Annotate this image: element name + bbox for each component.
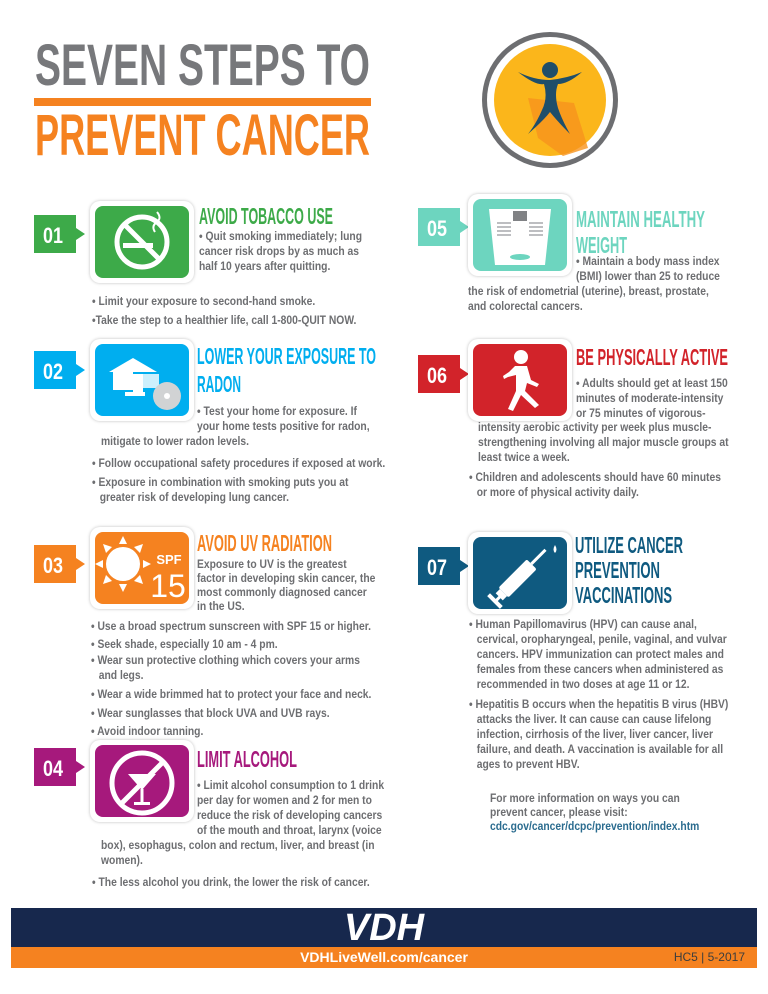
panel: 07 vaccinations: failure, and death. A vaccination is available for all — [477, 742, 723, 756]
text: minutes of moderate-intensity — [576, 391, 723, 405]
icon: house radon — [90, 339, 194, 421]
text: (BMI) lower than 25 to reduce — [576, 269, 720, 283]
text: in the US. — [197, 599, 245, 613]
text — [197, 778, 384, 837]
text: more information: For more information on ways you can — [490, 791, 680, 805]
text — [576, 254, 720, 283]
text: more information: prevent cancer, please visit: — [490, 805, 628, 819]
panel: 05 weight: and colorectal cancers. — [468, 299, 583, 313]
heading — [197, 343, 376, 397]
text bullets: • Seek shade, especially 10 am - 4 pm. — [91, 637, 278, 651]
heading: RADON — [197, 371, 241, 397]
text: cancer risk drops by as much as — [199, 244, 359, 258]
text: • Maintain a body mass index — [576, 254, 720, 268]
panel: 02 radon: greater risk of developing lung cancer. — [100, 490, 289, 504]
text: Exposure to UV is the greatest — [197, 557, 347, 571]
text: half 10 years after quitting. — [199, 259, 330, 273]
number 01: 01 — [43, 223, 63, 248]
footer code: HC5 | 5-2017 — [674, 950, 745, 964]
panel: 06 active — [418, 337, 729, 499]
text bullet: • Children and adolescents should have 60 minutes — [469, 470, 721, 484]
panel: 03 uv: • Avoid indoor tanning. — [91, 724, 203, 738]
number 03 — [34, 545, 85, 583]
panel: 03 uv — [34, 525, 375, 738]
footer logo VDH: VDH — [344, 907, 424, 949]
icon: sun spf — [90, 527, 194, 609]
icon: runner — [468, 339, 572, 421]
text — [197, 404, 370, 433]
number 04: 04 — [43, 756, 64, 781]
panel: 07 vaccinations: infection, cirrhosis of the liver, liver cancer, liver — [477, 727, 713, 741]
text bullets: • Follow occupational safety procedures if exposed at work. — [92, 456, 385, 470]
heading — [575, 532, 683, 608]
text: most commonly diagnosed cancer — [197, 585, 367, 599]
number 07 — [418, 547, 468, 585]
number 06 — [418, 355, 468, 393]
text bullets — [92, 294, 356, 327]
title — [34, 33, 371, 168]
panel: 04 alcohol: box), esophagus, colon and rectum, liver, and breast (in — [101, 838, 375, 852]
text bullets: • Limit your exposure to second-hand smoke. — [92, 294, 315, 308]
panel: 04 alcohol — [34, 738, 384, 889]
icon: sun spf: SPF — [156, 552, 182, 567]
footer url — [11, 947, 757, 968]
heading — [576, 206, 705, 256]
text: • Test your home for exposure. If — [197, 404, 357, 418]
panel: 03 uv: • Wear a wide brimmed hat to protect your face and neck. — [91, 687, 371, 701]
text: factor in developing skin cancer, the — [197, 571, 375, 585]
text bullet: • The less alcohol you drink, the lower the risk of cancer. — [92, 875, 370, 889]
panel: 01 avoid tobacco — [34, 199, 362, 327]
panel: 03 uv: • Wear sunglasses that block UVA and UVB rays. — [91, 706, 330, 720]
text bullets: • Human Papillomavirus (HPV) can cause anal, — [469, 617, 697, 631]
number 02 — [34, 351, 85, 389]
panel: 02 radon: • Exposure in combination with smoking puts you at — [92, 475, 348, 489]
panel: 06 active: intensity aerobic activity per week plus muscle- — [478, 420, 711, 434]
icon: logo figure — [482, 32, 618, 168]
text — [199, 229, 362, 273]
text bullets: cancers. HPV immunization can protect males and — [477, 647, 724, 661]
icon: syringe — [468, 532, 572, 614]
text bullets: •Take the step to a healthier life, call 1-800-QUIT NOW. — [92, 313, 356, 327]
number 04 — [34, 748, 85, 786]
panel: 03 uv: and legs. — [99, 668, 143, 682]
panel: 07 vaccinations — [418, 530, 728, 771]
panel: 05 weight: the risk of endometrial (uterine), breast, prostate, — [468, 284, 709, 298]
footer — [11, 907, 757, 968]
text bullets: • Use a broad spectrum sunscreen with SPF 15 or higher. — [91, 619, 371, 633]
number 05: 05 — [427, 216, 447, 241]
icon: sun spf: 15 — [150, 568, 186, 604]
panel: 07 vaccinations: • Hepatitis B occurs when the hepatitis B virus (HBV) — [469, 697, 728, 711]
text: or 75 minutes of vigorous- — [576, 406, 706, 420]
text: more information — [490, 791, 699, 833]
text: reduce the risk of developing cancers — [197, 808, 382, 822]
panel: 02 radon — [34, 337, 385, 504]
text: your home tests positive for radon, — [197, 419, 370, 433]
number 03: 03 — [43, 553, 63, 578]
text — [197, 557, 375, 613]
icon: no smoking — [90, 201, 194, 283]
text: • Limit alcohol consumption to 1 drink — [197, 778, 384, 792]
number 05 — [418, 208, 468, 246]
panel: 02 radon: mitigate to lower radon levels. — [101, 434, 249, 448]
text: of the mouth and throat, larynx (voice — [197, 823, 382, 837]
text bullets: recommended in two doses at age 11 or 12. — [477, 677, 690, 691]
panel: 04 alcohol: women). — [101, 853, 143, 867]
text: per day for women and 2 for men to — [197, 793, 372, 807]
number 02: 02 — [43, 359, 63, 384]
panel: 06 active: strengthening involving all major muscle groups at — [478, 435, 729, 449]
footer url: VDHLiveWell.com/cancer — [300, 949, 468, 965]
number 06: 06 — [427, 363, 447, 388]
icon: scale — [468, 194, 572, 276]
text bullets: females from these cancers when administered as — [477, 662, 723, 676]
footer logo VDH — [11, 908, 757, 947]
text: • Adults should get at least 150 — [576, 376, 728, 390]
icon: no alcohol — [90, 740, 194, 822]
text bullets — [469, 617, 727, 691]
text: more information: cdc.gov/cancer/dcpc/prevention/index.htm — [490, 819, 699, 833]
text bullet: or more of physical activity daily. — [477, 485, 639, 499]
panel: 03 uv: • Wear sun protective clothing which covers your arms — [91, 653, 360, 667]
text bullets — [91, 619, 371, 651]
number 01 — [34, 215, 85, 253]
panel: 07 vaccinations: ages to prevent HBV. — [477, 757, 580, 771]
panel: 07 vaccinations: attacks the liver. It can cause can cause lifelong — [477, 712, 711, 726]
text bullet — [469, 470, 721, 499]
text — [576, 376, 728, 420]
number 07: 07 — [427, 555, 447, 580]
panel: 05 weight — [418, 192, 720, 313]
panel: 06 active: least twice a week. — [478, 450, 570, 464]
text bullets: cervical, oropharyngeal, penile, vaginal, and vulvar — [477, 632, 727, 646]
text: • Quit smoking immediately; lung — [199, 229, 362, 243]
